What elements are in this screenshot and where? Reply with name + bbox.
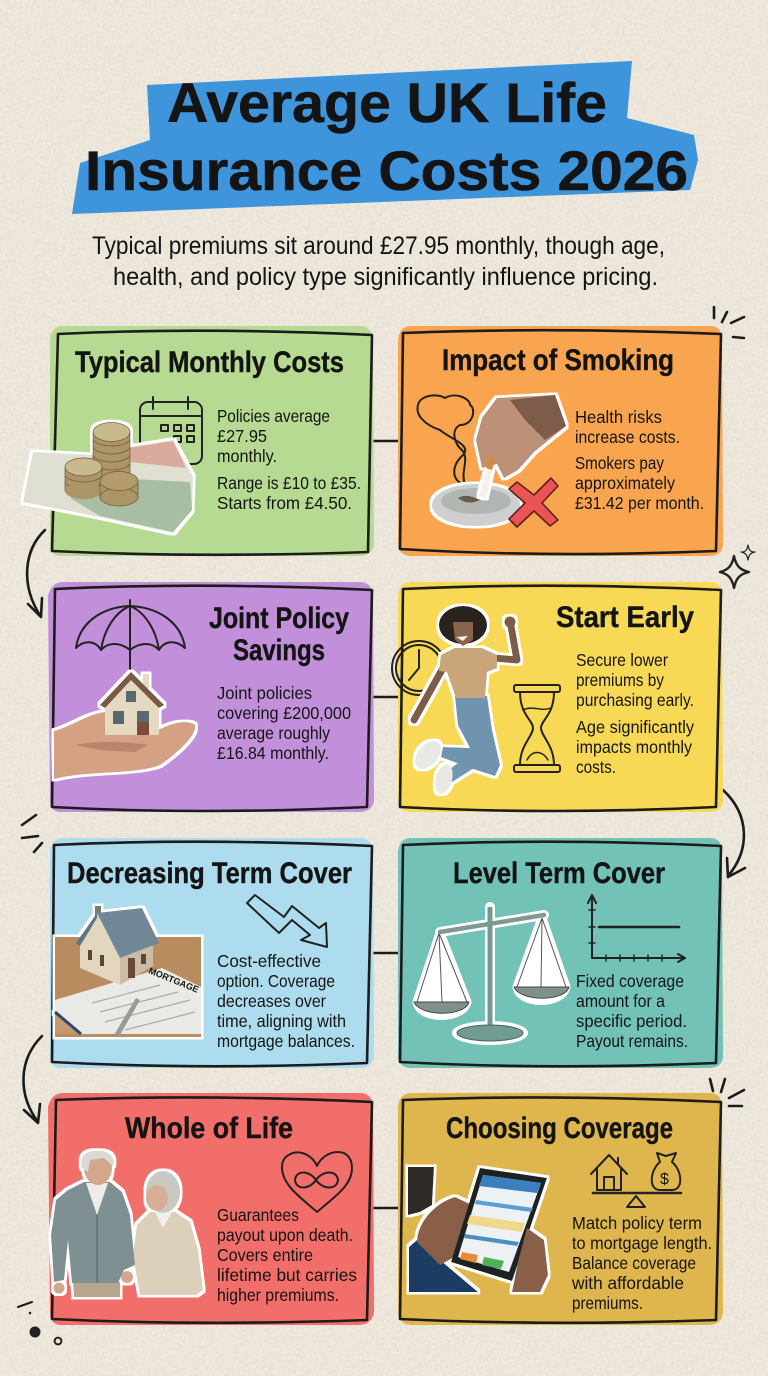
- text: Smokers pay: [575, 453, 664, 473]
- text: Range is £10 to £35.: [217, 473, 361, 493]
- panel: joint policy savings: [48, 582, 374, 812]
- text: £27.95: [217, 426, 267, 446]
- chart: level line: [588, 895, 685, 962]
- doodle: dots bottom left: [18, 1302, 61, 1344]
- text: Guarantees: [217, 1205, 299, 1225]
- text: specific period.: [576, 1011, 687, 1031]
- heading: Decreasing Term Cover: [67, 857, 352, 890]
- text: amount for a: [576, 991, 665, 1011]
- text: [575, 407, 704, 513]
- image: model house on mortgage paper: MORTGAGE: [147, 966, 200, 995]
- text: Covers entire: [217, 1245, 313, 1265]
- heading: Level Term Cover: [453, 857, 665, 890]
- text: [217, 683, 351, 763]
- panel: level term cover: [398, 838, 723, 1068]
- text: higher premiums.: [217, 1285, 339, 1305]
- text: time, aligning with: [217, 1011, 346, 1031]
- heading: [209, 602, 349, 667]
- icon: house and money bag on seesaw: [591, 1153, 681, 1207]
- panel: start early: [392, 582, 723, 812]
- text: Payout remains.: [576, 1031, 688, 1051]
- heading: Whole of Life: [125, 1112, 293, 1145]
- image: model house on mortgage paper: [55, 906, 201, 1037]
- doodle: sparks left: [22, 815, 42, 852]
- doodle: sparkle stars: [720, 545, 755, 588]
- icon: zigzag down arrow: [247, 895, 327, 947]
- text: approximately: [575, 473, 675, 493]
- image: senior couple: [51, 1151, 203, 1297]
- panel: decreasing term cover: [50, 838, 374, 1068]
- panel: whole of life: [48, 1093, 374, 1325]
- connector lines: [372, 441, 398, 1208]
- text: mortgage balances.: [217, 1031, 355, 1051]
- text: [217, 1205, 357, 1305]
- text: [576, 971, 688, 1051]
- text: [571, 1213, 712, 1313]
- text: Starts from £4.50.: [217, 493, 352, 513]
- icon: house and money bag on seesaw: $: [660, 1171, 669, 1188]
- text: monthly.: [217, 446, 277, 466]
- text: Balance coverage: [572, 1253, 696, 1273]
- text: impacts monthly: [576, 737, 692, 757]
- text: Joint policies: [217, 683, 312, 703]
- text: [217, 951, 355, 1051]
- text: Fixed coverage: [576, 971, 684, 991]
- heading: Typical Monthly Costs: [75, 346, 344, 379]
- text: premiums by: [576, 670, 664, 690]
- heading: Start Early: [556, 601, 694, 634]
- text: Health risks: [575, 407, 662, 427]
- title: [72, 61, 698, 214]
- image: jumping woman: [410, 606, 517, 796]
- text: option. Coverage: [217, 971, 335, 991]
- text: [217, 406, 361, 513]
- title highlight: [72, 61, 698, 214]
- image: hands holding tablet: [408, 1167, 548, 1292]
- image: hand holding house: [54, 672, 195, 779]
- text: Cost-effective: [217, 951, 321, 971]
- panel: typical monthly costs: [23, 326, 374, 556]
- image: ashtray: [432, 484, 520, 526]
- heading: Impact of Smoking: [442, 344, 674, 377]
- icon: hourglass: [514, 685, 560, 772]
- text: average roughly: [217, 723, 330, 743]
- image: balance scales: [414, 907, 569, 1043]
- text: £31.42 per month.: [575, 493, 704, 513]
- heading: Savings: [233, 634, 325, 667]
- text: payout upon death.: [217, 1225, 353, 1245]
- text: increase costs.: [575, 427, 680, 447]
- image: hand stubbing cigarette: [476, 395, 566, 498]
- text: decreases over: [217, 991, 326, 1011]
- text: to mortgage length.: [572, 1233, 712, 1253]
- text: Age significantly: [576, 717, 694, 737]
- doodle: sparks top right: [714, 307, 744, 338]
- image: banknotes and coins: [23, 422, 193, 533]
- heading: Choosing Coverage: [446, 1112, 673, 1145]
- text: Policies average: [217, 406, 330, 426]
- arrow: panel 4 to panel 6: [723, 790, 745, 877]
- text: purchasing early.: [576, 690, 694, 710]
- subtitle: health, and policy type significantly influence pricing.: [113, 263, 658, 291]
- panel: impact of smoking: [398, 326, 723, 556]
- icon: heart with infinity: [282, 1152, 352, 1212]
- text: covering £200,000: [217, 703, 351, 723]
- icon: umbrella: [76, 600, 185, 672]
- icon: calendar: [140, 397, 202, 464]
- subtitle: [92, 232, 665, 291]
- text: Secure lower: [576, 650, 668, 670]
- arrow: panel 5 to panel 7: [23, 1036, 42, 1123]
- text: [576, 650, 694, 777]
- arrow: panel 1 to panel 3: [27, 530, 45, 617]
- text: with affordable: [571, 1273, 684, 1293]
- icon: clock: [392, 641, 446, 695]
- subtitle: Typical premiums sit around £27.95 monthly, though age,: [92, 232, 665, 260]
- heading: Joint Policy: [209, 602, 349, 635]
- text: lifetime but carries: [217, 1265, 357, 1285]
- text: £16.84 monthly.: [217, 743, 329, 763]
- text: costs.: [576, 757, 616, 777]
- icon: smoke: [417, 395, 473, 485]
- text: Match policy term: [572, 1213, 702, 1233]
- doodle: sparks lower right: [710, 1079, 744, 1106]
- title: Average UK Life: [167, 71, 607, 134]
- icon: red cross: [509, 478, 558, 527]
- panel: choosing coverage: [398, 1093, 723, 1325]
- text: premiums.: [572, 1293, 643, 1313]
- title: Insurance Costs 2026: [85, 139, 688, 202]
